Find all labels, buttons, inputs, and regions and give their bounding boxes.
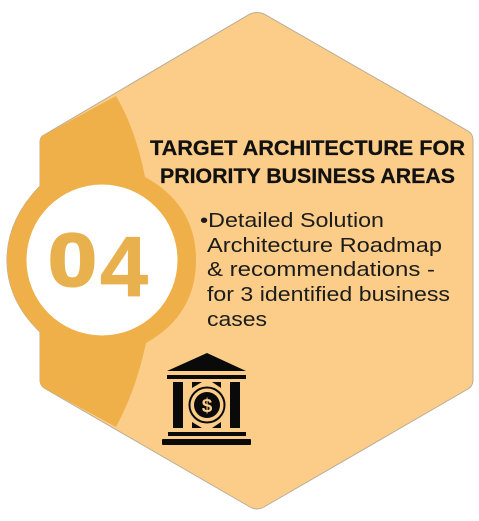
body text: for 3 identified business [207, 284, 450, 306]
heading: TARGET ARCHITECTURE FOR [150, 137, 465, 160]
number 04: 0 [48, 218, 97, 302]
heading: PRIORITY BUSINESS AREAS [160, 165, 455, 188]
panel: darker left band [7, 96, 196, 427]
number 04 [48, 218, 148, 315]
body text: Architecture Roadmap [207, 235, 442, 257]
icon: bank with dollar coin: $ [202, 396, 213, 417]
body text: & recommendations - [207, 259, 435, 281]
icon: bank with dollar coin [162, 353, 251, 445]
heading [150, 137, 465, 188]
white number circle [26, 184, 178, 336]
body text: cases [207, 309, 267, 331]
body text: •Detailed Solution [200, 210, 384, 232]
body text [200, 210, 450, 331]
number 04: 4 [100, 220, 148, 315]
